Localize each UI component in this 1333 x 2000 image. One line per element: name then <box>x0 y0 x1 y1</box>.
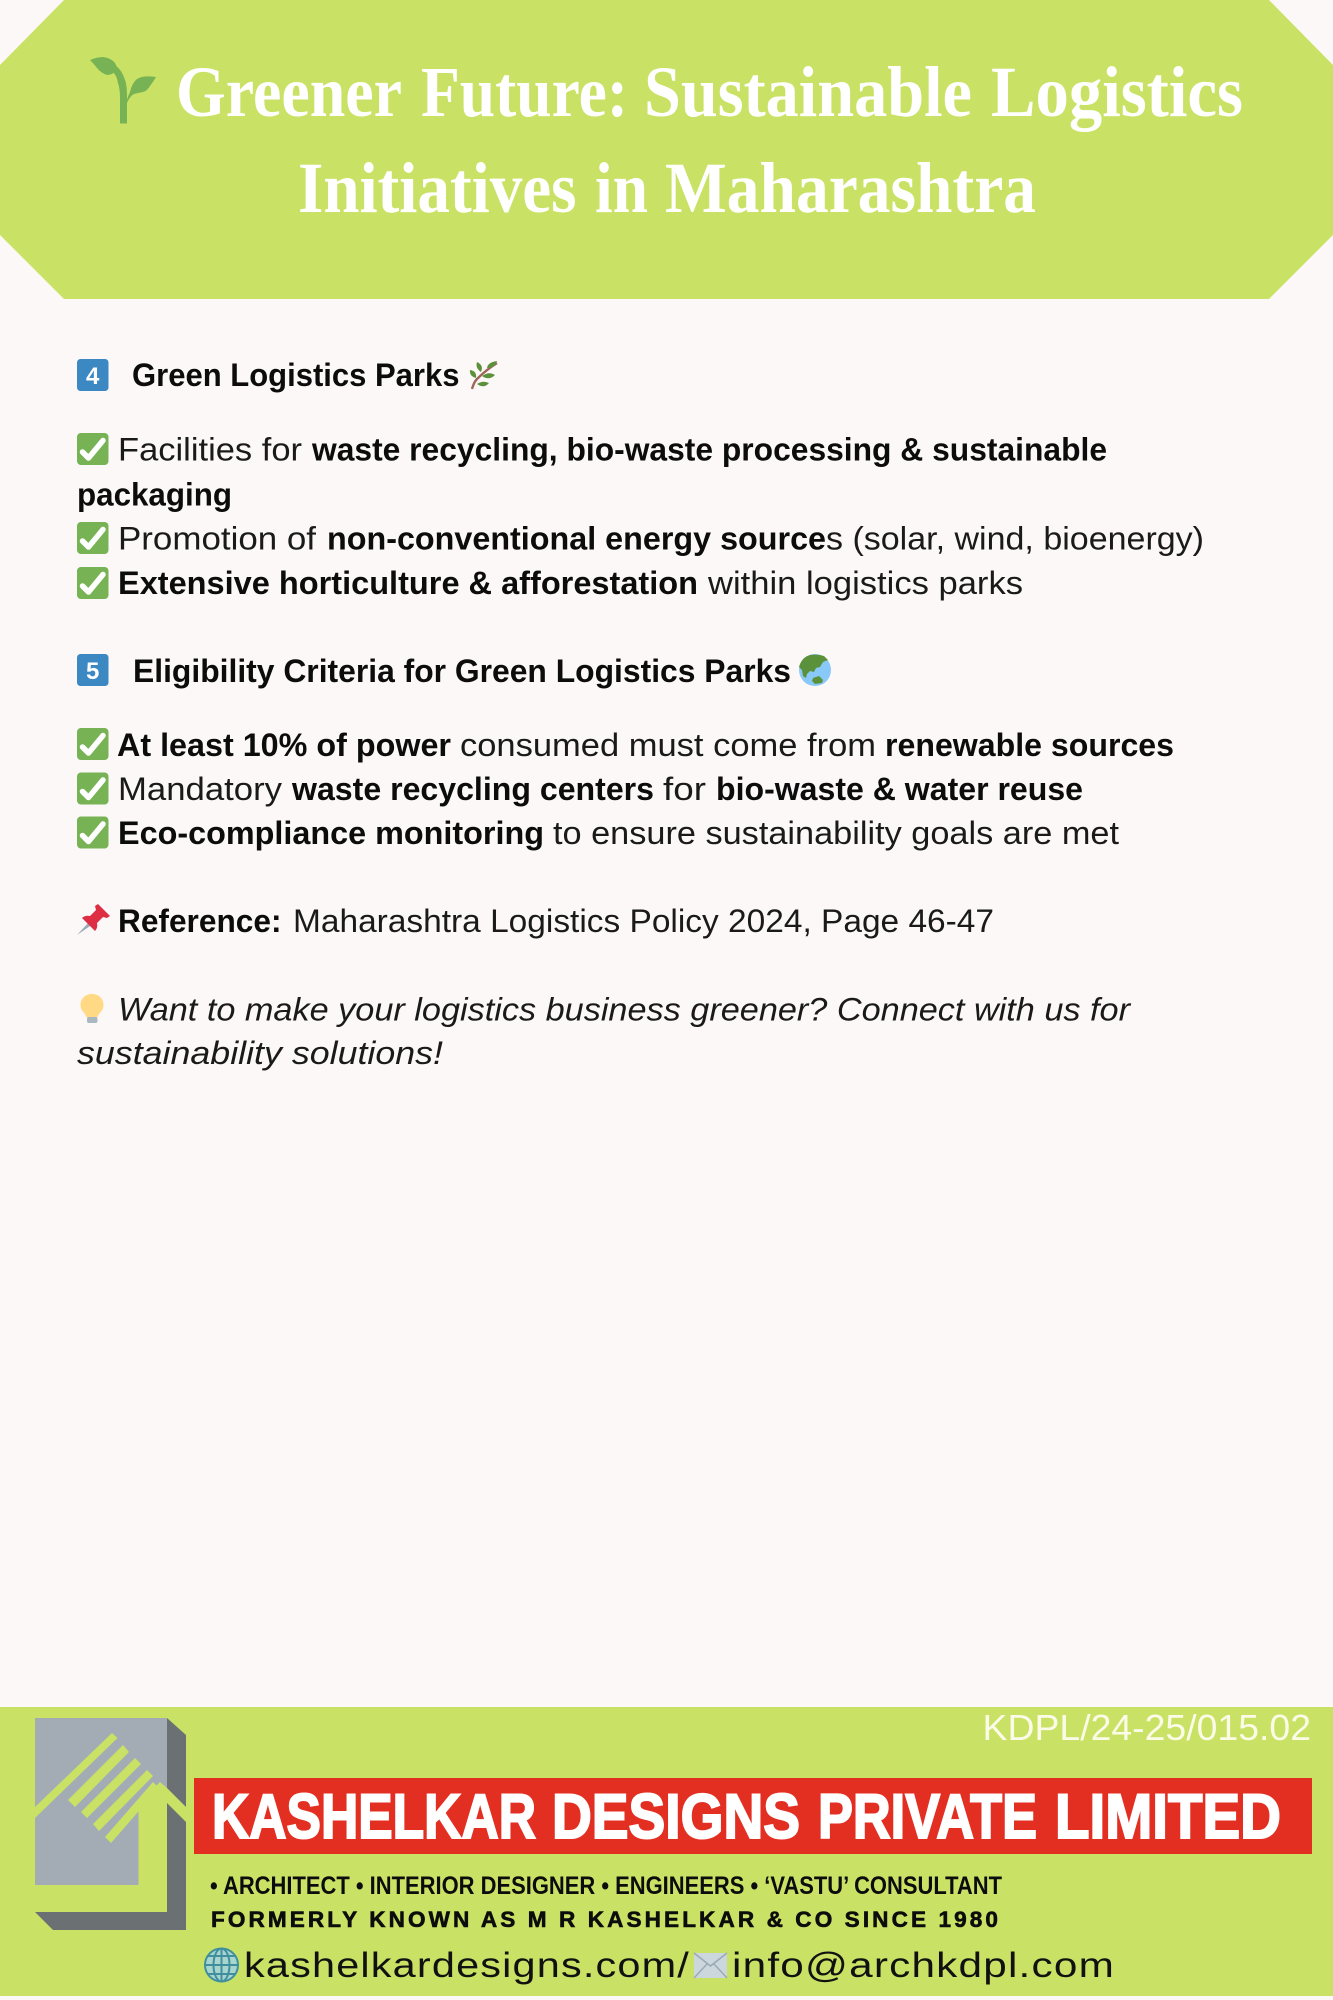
icon: keycap 5: 5 <box>86 658 99 685</box>
services line: • ARCHITECT • INTERIOR DESIGNER • ENGINEERS • ‘VASTU’ CONSULTANT <box>210 1872 1002 1900</box>
icon: light bulb <box>80 994 104 1023</box>
footer band <box>0 1707 1333 1996</box>
bullet: horticulture <box>77 565 1023 601</box>
title: Initiatives <box>298 148 576 228</box>
icon: globe <box>205 1948 238 1982</box>
bullet: recycling centers: Mandatory <box>118 771 282 807</box>
bullet: eco-compliance: Eco-compliance monitoring <box>118 815 544 851</box>
bullet: recycling centers: waste recycling centers <box>291 771 654 807</box>
company name bar: DESIGNS <box>552 1782 800 1852</box>
call to action: sustainability solutions! <box>77 1035 443 1071</box>
icon: keycap 4: 4 <box>86 363 100 390</box>
bullet: recycling centers: bio-waste & water reuse <box>716 771 1083 807</box>
icon: pushpin <box>77 904 110 935</box>
bullet: waste recycling: waste recycling, bio-waste processing & sustainable <box>311 432 1107 468</box>
header banner <box>0 0 1333 299</box>
icon: envelope <box>694 1953 727 1978</box>
bullet: horticulture: Extensive horticulture & afforestation <box>118 565 698 601</box>
title: Sustainable <box>644 52 972 132</box>
icon: globe <box>799 654 831 686</box>
bullet: energy sources: Promotion of <box>118 520 316 556</box>
bullet: waste recycling <box>77 432 1107 512</box>
icon: keycap 4 <box>77 359 108 391</box>
document reference: KDPL/24-25/015.02 <box>982 1707 1311 1748</box>
section 4: green logistics parks <box>77 357 1204 601</box>
section 5: eligibility criteria <box>77 653 1174 851</box>
bullet: renewable power <box>77 727 1174 763</box>
bullet: eco-compliance <box>77 815 1119 851</box>
bullet: waste recycling: Facilities for <box>118 432 302 468</box>
bullet: energy sources: s (solar, wind, bioenergy) <box>826 520 1204 556</box>
bullet: renewable power: At least 10% of power <box>117 727 451 763</box>
title <box>176 52 1243 228</box>
title: Logistics <box>991 52 1243 132</box>
company name bar <box>194 1778 1312 1854</box>
bullet: energy sources <box>77 520 1204 556</box>
bullet: renewable power: consumed must come from <box>460 727 876 763</box>
company name bar: PRIVATE <box>818 1782 1037 1852</box>
bullet: energy sources: non-conventional energy source <box>327 520 826 556</box>
reference note: Reference: <box>118 903 282 939</box>
bullet: recycling centers: for <box>663 771 706 807</box>
bullet: horticulture: within logistics parks <box>707 565 1023 601</box>
icon: herb <box>470 361 497 389</box>
reference note: Maharashtra Logistics Policy 2024, Page 46-47 <box>293 903 994 939</box>
icon: keycap 5 <box>77 654 108 686</box>
formerly known line: FORMERLY KNOWN AS M R KASHELKAR & CO SINCE 1980 <box>211 1907 1001 1932</box>
section 5 heading: Eligibility Criteria for Green Logistics Parks <box>133 653 791 689</box>
contact line: info@archkdpl.com <box>732 1946 1115 1985</box>
call to action: Want to make your logistics business greener? Connect with us for <box>118 992 1131 1028</box>
call to action <box>77 992 1131 1071</box>
contact line: kashelkardesigns.com/ <box>244 1946 690 1985</box>
title: in <box>595 148 648 228</box>
title: Greener <box>176 52 402 132</box>
bullet: waste recycling: packaging <box>77 476 232 512</box>
contact line <box>205 1946 1115 1985</box>
section 4 heading: Green Logistics Parks <box>132 357 460 393</box>
bullet: recycling centers <box>77 771 1083 807</box>
title: Future: <box>421 52 628 132</box>
icon: seedling <box>90 57 156 124</box>
logo <box>35 1718 186 1930</box>
company name bar: LIMITED <box>1055 1782 1281 1852</box>
title: Maharashtra <box>665 148 1036 228</box>
bullet: eco-compliance: to ensure sustainability goals are met <box>553 815 1119 851</box>
bullet: renewable power: renewable sources <box>885 727 1174 763</box>
company name bar: KASHELKAR <box>212 1782 536 1852</box>
